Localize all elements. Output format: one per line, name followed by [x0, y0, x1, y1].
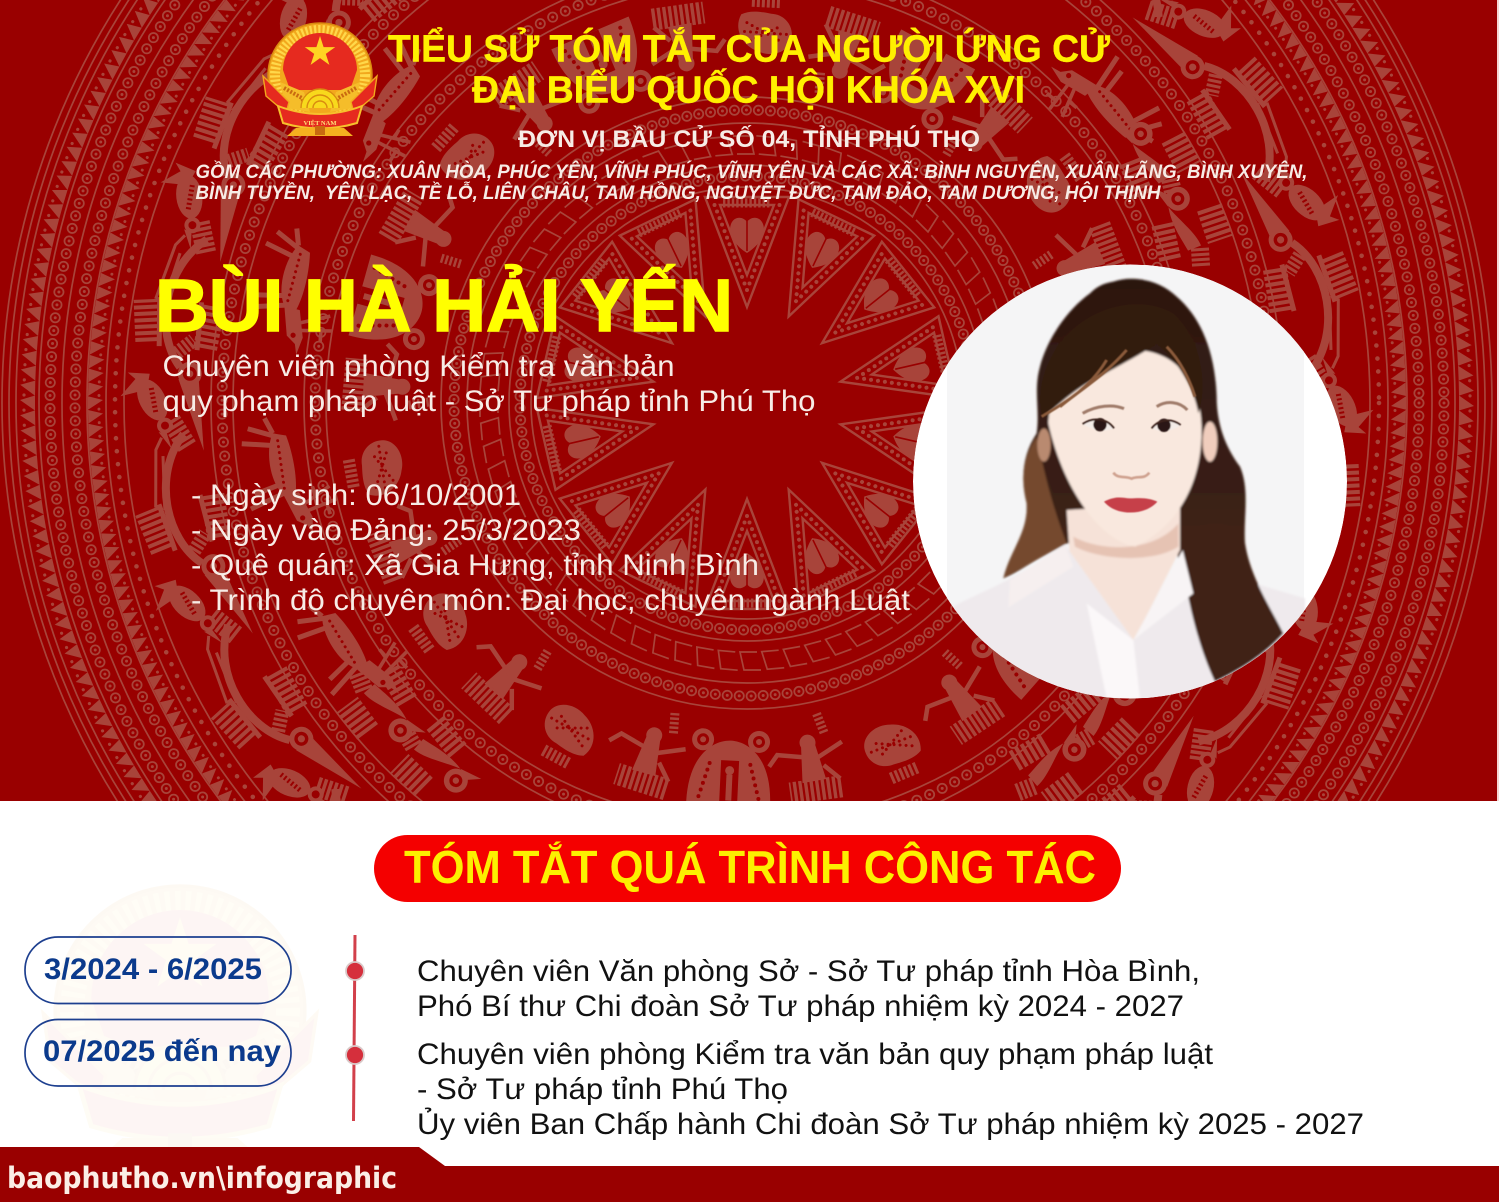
- text block: personal details: - Trình độ chuyên môn: Đại học, chuyên ngành Luật: [191, 584, 911, 617]
- thin right edge of banner: [1497, 0, 1499, 801]
- heading pill: work history: TÓM TẮT QUÁ TRÌNH CÔNG TÁC: [404, 841, 1096, 893]
- icon: national emblem: [263, 23, 377, 136]
- heading: electoral unit: ĐƠN VỊ BẦU CỬ SỐ 04, TỈNH PHÚ THỌ: [518, 124, 980, 153]
- footer bar with source: baophutho.vn\infographic: [7, 1161, 397, 1195]
- title: TIỂU SỬ TÓM TẮT CỦA NGƯỜI ỨNG CỬ: [388, 26, 1110, 70]
- date pill: 3/2024 - 6/2025: 3/2024 - 6/2025: [44, 953, 262, 986]
- watermark: faint emblem: [43, 886, 317, 1157]
- panel: red banner with bronze drum pattern: [0, 0, 1497, 801]
- icon: national emblem: VIỆT NAM: [304, 119, 336, 127]
- text block: first position: Phó Bí thư Chi đoàn Sở Tư pháp nhiệm kỳ 2024 - 2027: [417, 990, 1184, 1023]
- text block: candidate position: quy phạm pháp luật - Sở Tư pháp tỉnh Phú Thọ: [162, 385, 816, 418]
- text block: list of wards and communes: GỒM CÁC PHƯỜNG: XUÂN HÒA, PHÚC YÊN, VĨNH PHÚC, VĨNH YÊN VÀ CÁC XÃ: BÌNH NGUYÊN, XUÂN LÃNG, BÌNH XUYÊN,: [196, 161, 1308, 183]
- drum pattern: [1, 0, 1493, 801]
- text block: personal details: - Quê quán: Xã Gia Hưng, tỉnh Ninh Bình: [191, 549, 759, 582]
- text block: current position: - Sở Tư pháp tỉnh Phú Thọ: [417, 1073, 788, 1106]
- date pill: 07/2025 đến nay: 07/2025 đến nay: [43, 1035, 281, 1068]
- text block: personal details: [191, 479, 911, 617]
- portrait photo in circle: [913, 264, 1347, 698]
- timeline with two markers: [346, 935, 364, 1121]
- text block: candidate position: Chuyên viên phòng Kiểm tra văn bản: [162, 350, 674, 383]
- title: [388, 26, 1110, 112]
- text block: first position: Chuyên viên Văn phòng Sở - Sở Tư pháp tỉnh Hòa Bình,: [417, 955, 1200, 988]
- date pill: 3/2024 - 6/2025: [25, 937, 291, 1004]
- text block: list of wards and communes: BÌNH TUYỀN, YÊN LẠC, TỀ LỖ, LIÊN CHÂU, TAM HỒNG, NGUYỆT ĐỨC, TAM ĐẢO, TAM DƯƠNG, HỘI THỊNH: [196, 182, 1162, 204]
- text block: current position: Ủy viên Ban Chấp hành Chi đoàn Sở Tư pháp nhiệm kỳ 2025 - 2027: [417, 1107, 1364, 1141]
- text block: first position: [417, 955, 1200, 1023]
- text block: personal details: - Ngày sinh: 06/10/2001: [191, 479, 521, 512]
- text block: current position: [417, 1038, 1364, 1141]
- heading: candidate name: BÙI HÀ HẢI YẾN: [155, 264, 733, 347]
- text block: list of wards and communes: [196, 161, 1308, 204]
- text block: personal details: - Ngày vào Đảng: 25/3/2023: [191, 514, 581, 547]
- text block: current position: Chuyên viên phòng Kiểm tra văn bản quy phạm pháp luật: [417, 1038, 1214, 1071]
- title: ĐẠI BIỂU QUỐC HỘI KHÓA XVI: [472, 66, 1025, 112]
- date pill: 07/2025 đến nay: [25, 1020, 291, 1086]
- footer bar with source: [0, 1147, 1499, 1202]
- text block: candidate position: [162, 350, 816, 418]
